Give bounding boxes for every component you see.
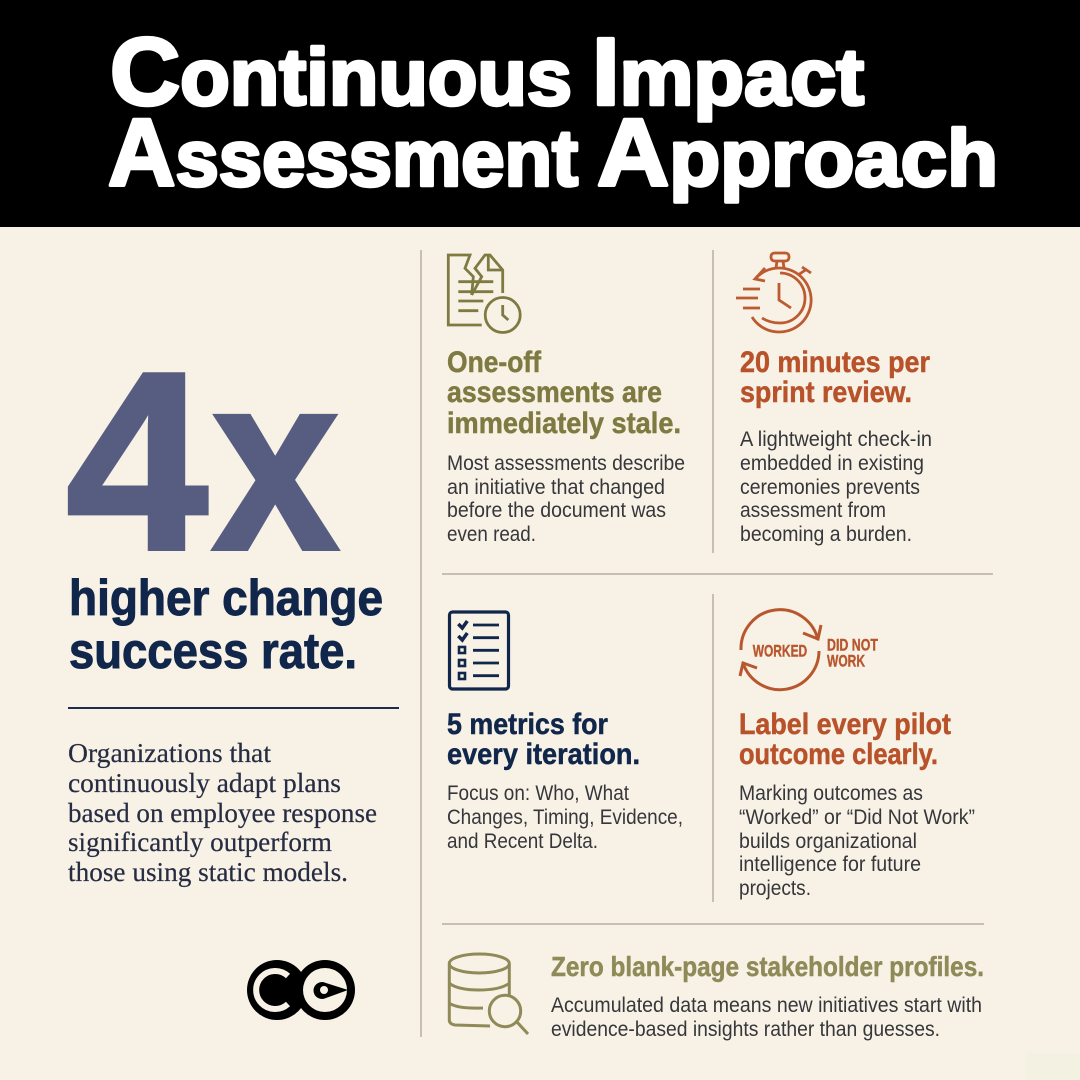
heading xyxy=(740,346,930,409)
heading: outcome clearly. xyxy=(739,738,938,771)
stat label: success rate. xyxy=(69,623,357,679)
heading: Label every pilot xyxy=(739,708,951,741)
stat description: significantly outperform xyxy=(68,827,332,857)
icon: torn document with clock xyxy=(448,255,520,332)
body text: “Worked” or “Did Not Work” xyxy=(739,806,975,829)
body text xyxy=(739,782,975,900)
heading: 5 metrics for xyxy=(447,708,608,741)
stat description: Organizations that xyxy=(68,738,272,768)
body text: before the document was xyxy=(447,499,666,522)
heading: every iteration. xyxy=(447,738,640,771)
stat description: those using static models. xyxy=(68,857,348,887)
body text: an initiative that changed xyxy=(447,476,665,499)
icon: checklist xyxy=(450,612,508,689)
icon: worked / did not work cycle: DID NOT xyxy=(827,637,878,655)
heading: Zero blank-page stakeholder profiles. xyxy=(551,951,984,982)
body text: Accumulated data means new initiatives start with xyxy=(551,994,982,1017)
heading: assessments are xyxy=(447,376,662,409)
body text xyxy=(447,452,685,546)
icon: database with magnifier xyxy=(449,954,528,1034)
body text: intelligence for future xyxy=(739,853,921,876)
heading: 20 minutes per xyxy=(740,346,930,379)
body text: ceremonies prevents xyxy=(740,476,920,499)
panel: 5 metrics xyxy=(447,612,683,853)
body text: Marking outcomes as xyxy=(739,782,923,805)
stat description xyxy=(68,738,377,887)
stat label: higher change xyxy=(69,570,383,626)
title banner: Impact xyxy=(592,18,864,126)
big number xyxy=(66,319,339,603)
body text: Changes, Timing, Evidence, xyxy=(447,806,683,829)
icon: worked / did not work cycle xyxy=(740,610,878,690)
body text: A lightweight check-in xyxy=(740,428,932,451)
title banner xyxy=(0,0,1080,227)
body text: Focus on: Who, What xyxy=(447,782,629,805)
body text xyxy=(551,994,982,1041)
panel: 20 minutes xyxy=(736,253,932,546)
icon: logo xyxy=(247,960,355,1020)
body text: even read. xyxy=(447,523,536,546)
stat description: based on employee response xyxy=(68,798,377,828)
stat label xyxy=(69,570,383,679)
title banner: Continuous xyxy=(110,18,572,126)
body text: builds organizational xyxy=(739,830,917,853)
big number: x xyxy=(212,322,339,603)
panel: label every pilot xyxy=(739,610,975,900)
title banner: Approach xyxy=(597,100,998,206)
body text: evidence-based insights rather than guesses. xyxy=(551,1018,940,1041)
body text: embedded in existing xyxy=(740,452,924,475)
body text xyxy=(447,782,683,853)
heading xyxy=(447,708,640,771)
panel: 4x statistic xyxy=(66,319,399,887)
heading xyxy=(447,346,681,440)
panel: zero blank-page profiles xyxy=(449,951,984,1041)
stat description: continuously adapt plans xyxy=(68,768,341,798)
panel: one-off assessments xyxy=(447,255,685,546)
body text xyxy=(740,428,932,546)
body text: projects. xyxy=(739,877,811,900)
heading: sprint review. xyxy=(740,376,912,409)
body text: and Recent Delta. xyxy=(447,830,598,853)
body text: assessment from xyxy=(740,499,886,522)
body text: becoming a burden. xyxy=(740,523,912,546)
icon: worked / did not work cycle: WORK xyxy=(827,653,865,671)
big number: 4 xyxy=(66,319,208,603)
icon: worked / did not work cycle: WORKED xyxy=(753,643,807,661)
heading xyxy=(739,708,951,771)
heading: One-off xyxy=(447,346,542,379)
heading: immediately stale. xyxy=(447,407,681,440)
title banner: Assessment xyxy=(108,100,578,206)
body text: Most assessments describe xyxy=(447,452,685,475)
icon: stopwatch xyxy=(736,253,811,332)
